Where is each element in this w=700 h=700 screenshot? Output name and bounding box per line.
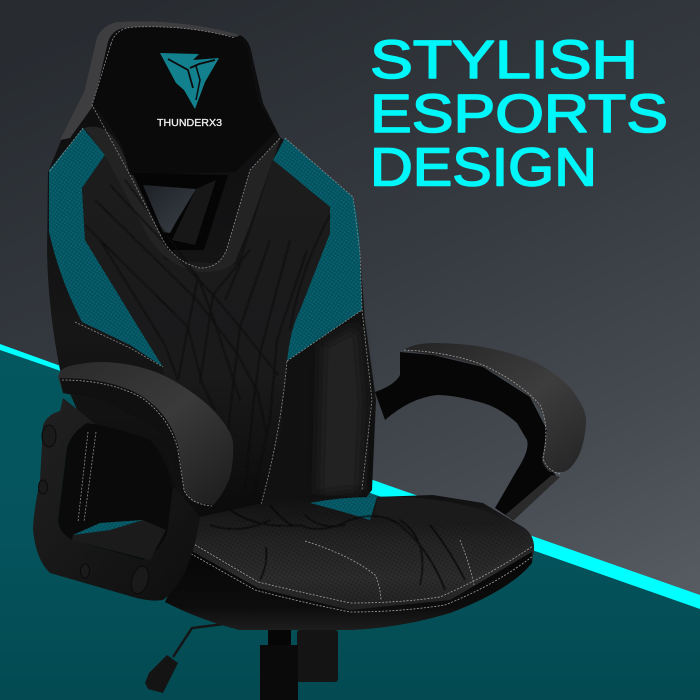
right teal mesh wing (273, 138, 362, 361)
cyan diagonal band (0, 344, 700, 609)
right armrest pad (403, 343, 586, 474)
arm opening interior (58, 423, 173, 560)
headrest opening (133, 173, 228, 250)
left teal mesh wing (49, 128, 163, 367)
left armrest pad (58, 362, 233, 506)
title (370, 30, 668, 198)
centre back panel (82, 155, 330, 520)
seat side bolster (375, 497, 510, 527)
seat cushion (165, 495, 534, 630)
brand name: THUNDERX3 (157, 117, 222, 129)
arm frame bolts (38, 425, 151, 596)
lower right back bolster (258, 310, 372, 515)
title: STYLISH (370, 30, 638, 90)
title: DESIGN (370, 138, 597, 198)
headrest (92, 27, 276, 175)
seat (165, 495, 534, 630)
logo mark (160, 53, 219, 109)
grey headrest side edge (60, 21, 240, 140)
right arm support (375, 352, 557, 520)
gas lift and lever (145, 622, 338, 700)
gaming chair (33, 21, 586, 700)
seat quilting (210, 505, 465, 590)
seat stitching (188, 540, 533, 612)
right arm strut highlight (505, 475, 560, 520)
seat front skirt (165, 550, 532, 630)
back quilting lines (85, 180, 330, 510)
left arm frame (33, 398, 200, 601)
stitching (49, 27, 372, 515)
title: ESPORTS (370, 84, 668, 144)
teal floor (0, 348, 700, 700)
carbon neck panel (84, 127, 281, 272)
seat teal insert (310, 497, 377, 520)
backrest shell (47, 21, 376, 540)
